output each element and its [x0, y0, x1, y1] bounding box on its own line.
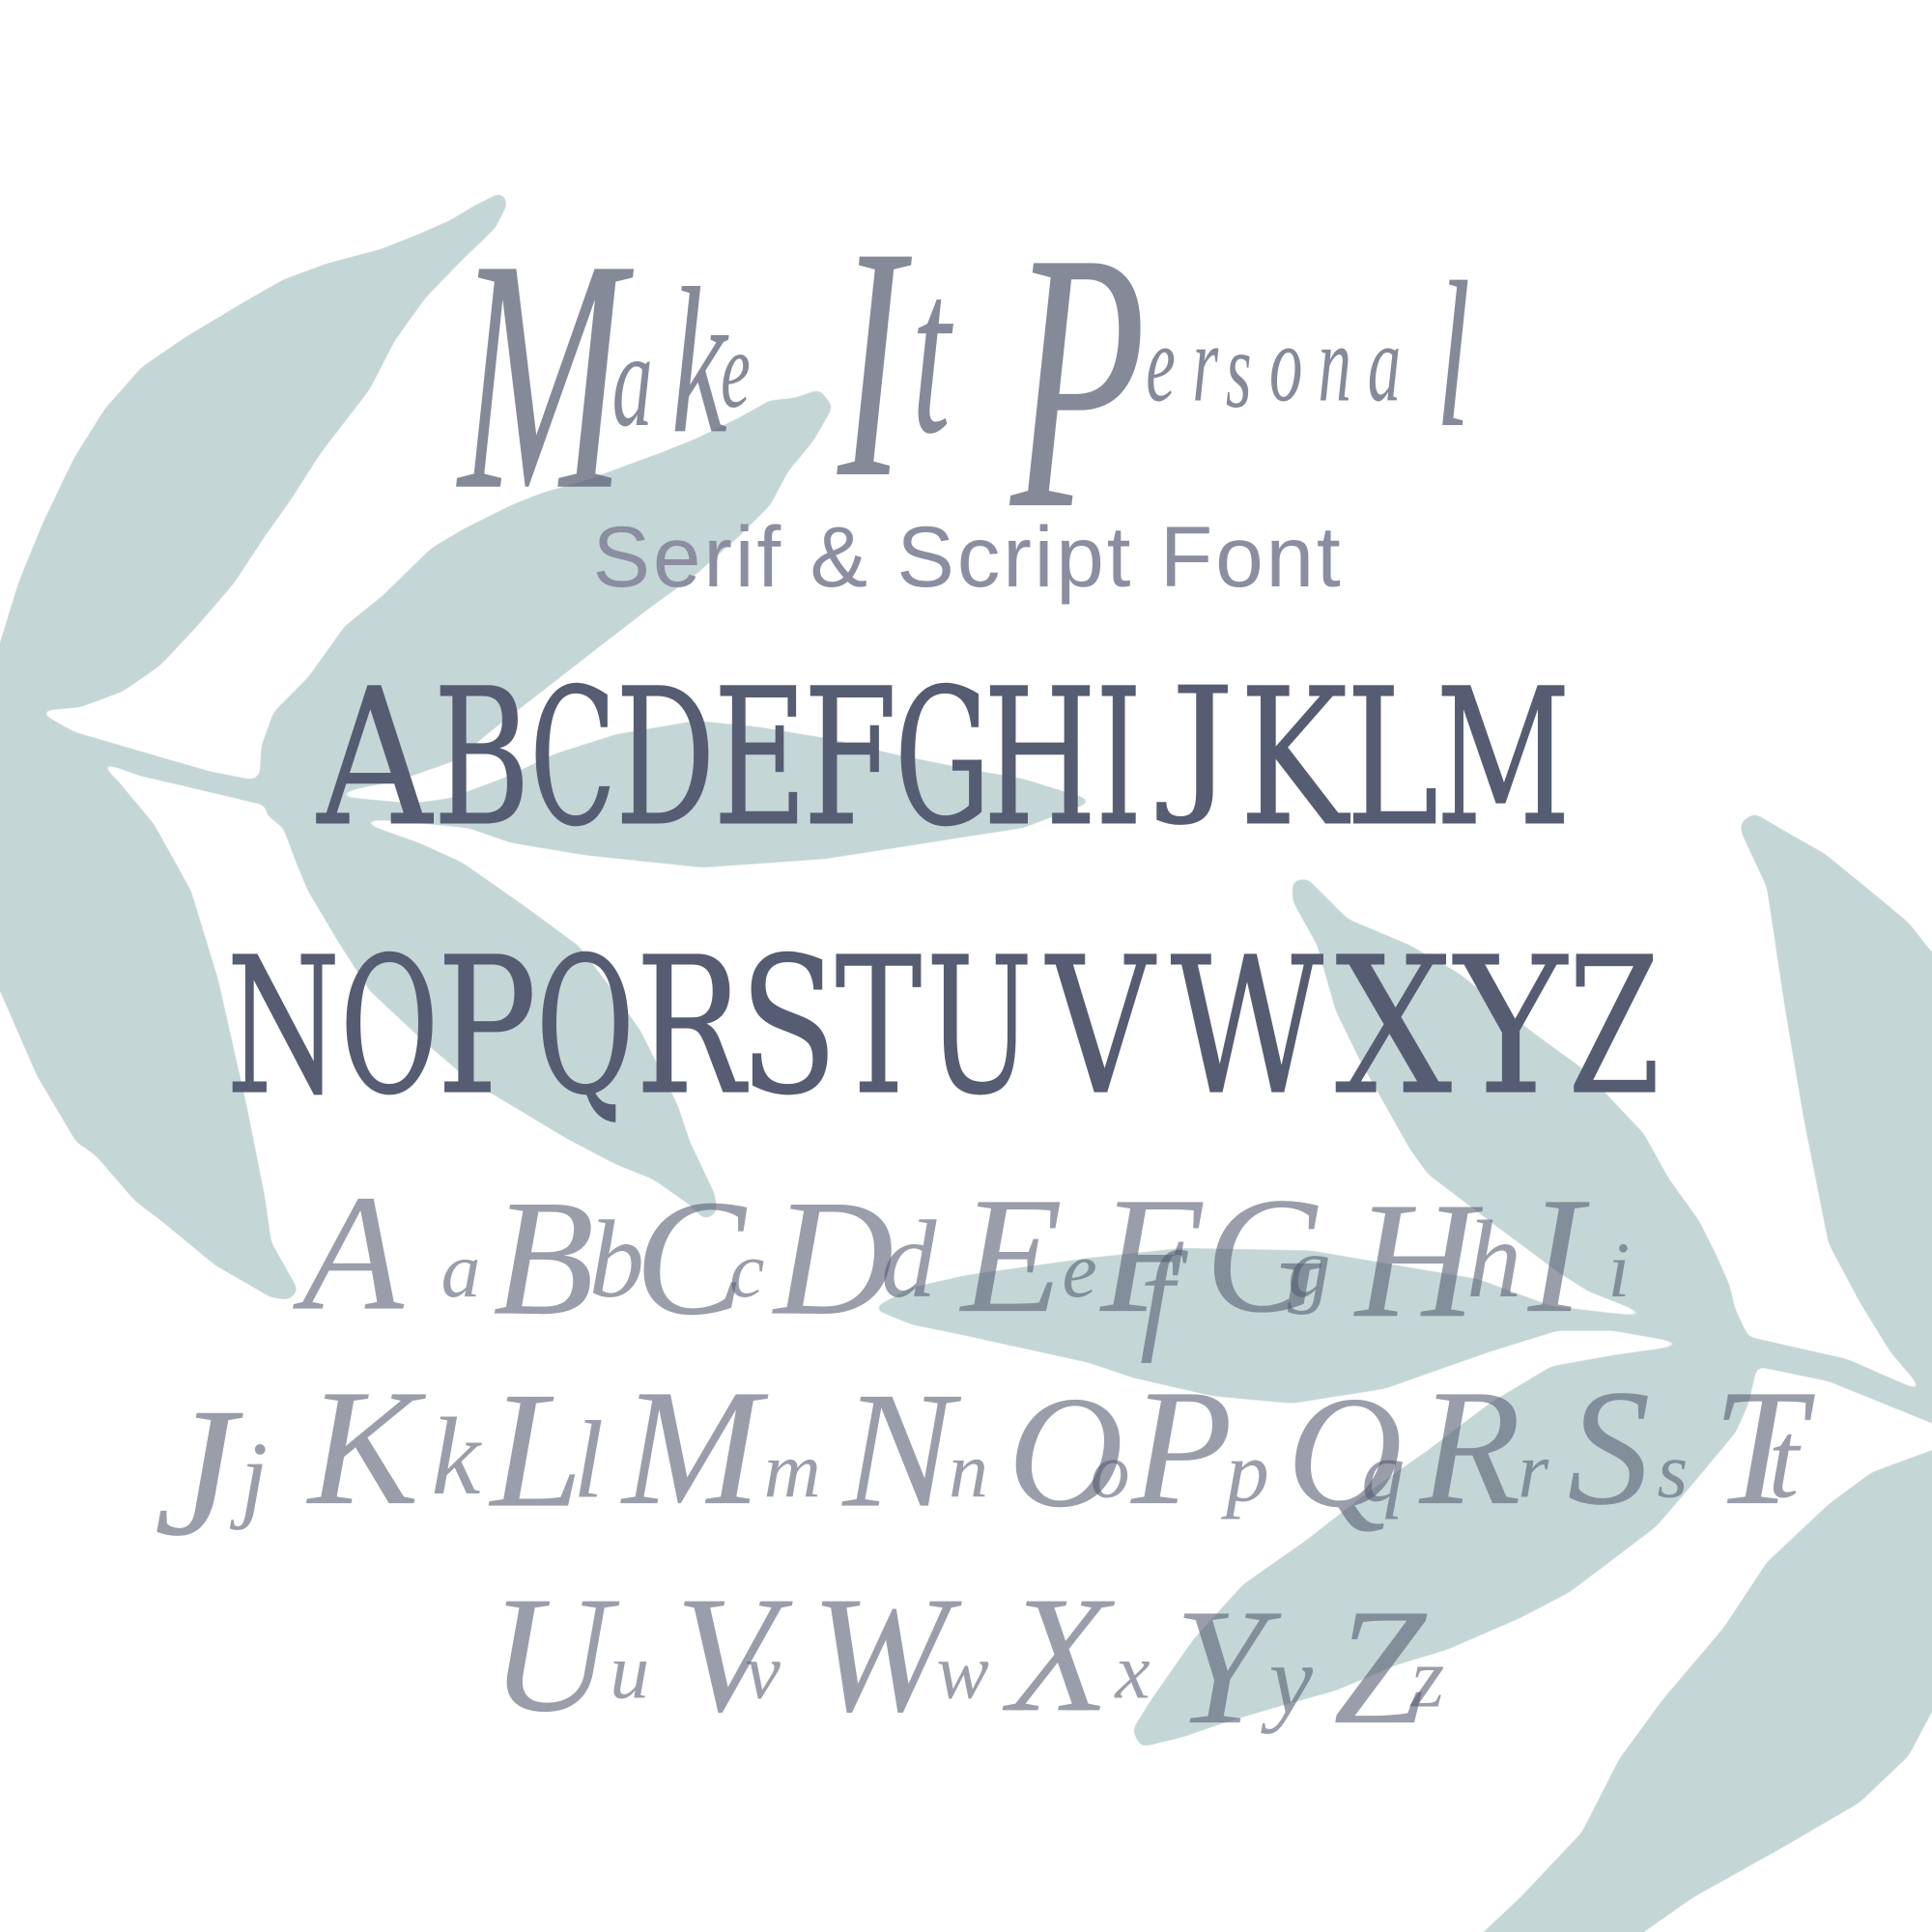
script alphabet row 3: U: [491, 1563, 620, 1747]
title: l: [1435, 239, 1470, 470]
script alphabet row 3: V: [675, 1563, 793, 1747]
serif alphabet row 2: W: [1171, 918, 1323, 1137]
script alphabet row 2: S: [1567, 1356, 1651, 1540]
script alphabet row 3: z: [1409, 1631, 1444, 1726]
script alphabet row 2: O: [1008, 1363, 1123, 1541]
script alphabet row 2: r: [1518, 1427, 1548, 1515]
right leaf branch: [872, 813, 1932, 1747]
script alphabet row 2: o: [1091, 1427, 1130, 1515]
script alphabet row 2: q: [1361, 1425, 1405, 1520]
script alphabet row 1: I: [1527, 1164, 1591, 1348]
title: n: [1319, 303, 1351, 425]
script alphabet row 2: M: [619, 1356, 769, 1540]
script alphabet row 3: x: [1114, 1628, 1151, 1716]
script alphabet row 2: n: [949, 1427, 988, 1515]
script alphabet row 2: p: [1220, 1425, 1269, 1520]
title: [455, 177, 1470, 586]
lower right leaf: [1454, 1435, 1932, 1932]
serif alphabet row 1: I: [1095, 649, 1142, 868]
title: r: [1192, 303, 1219, 425]
script alphabet row 1: F: [1099, 1164, 1204, 1348]
title: e: [1146, 303, 1176, 425]
serif alphabet row 1: [316, 647, 1571, 868]
script alphabet row 2: L: [488, 1359, 582, 1543]
script alphabet row 3: Y: [1175, 1576, 1283, 1759]
script alphabet row 3: X: [1002, 1563, 1115, 1747]
serif alphabet row 1: L: [1346, 649, 1438, 868]
script alphabet row 2: J: [154, 1371, 243, 1575]
script alphabet row 2: P: [1130, 1356, 1233, 1540]
title: P: [1008, 177, 1146, 586]
serif alphabet row 2: N: [226, 917, 340, 1137]
script alphabet row 3: v: [746, 1628, 781, 1716]
serif alphabet row 2: P: [437, 918, 537, 1137]
serif alphabet row 1: C: [529, 648, 616, 867]
script alphabet row 2: m: [764, 1427, 821, 1515]
script alphabet row 3: w: [936, 1628, 989, 1716]
serif alphabet row 2: U: [926, 918, 1033, 1137]
script alphabet row 1: a: [441, 1226, 480, 1314]
script alphabet row 1: c: [729, 1226, 764, 1314]
script alphabet row 3: y: [1261, 1626, 1314, 1735]
script alphabet row 2: k: [431, 1395, 482, 1518]
title: M: [455, 191, 637, 559]
title: o: [1269, 303, 1302, 425]
script alphabet row 1: A: [292, 1162, 404, 1346]
script alphabet row 1: E: [958, 1164, 1063, 1348]
script alphabet row 3: W: [810, 1563, 962, 1747]
script alphabet row 1: D: [772, 1167, 894, 1350]
serif alphabet row 1: B: [434, 648, 530, 867]
serif alphabet row 1: A: [316, 648, 434, 868]
script alphabet row 3: Z: [1333, 1576, 1428, 1759]
script alphabet row 1: h: [1466, 1198, 1521, 1321]
serif alphabet row 1: E: [714, 649, 807, 868]
script alphabet row 1: f: [1140, 1227, 1189, 1364]
serif alphabet row 1: M: [1435, 648, 1571, 867]
script alphabet row 2: t: [1768, 1399, 1802, 1521]
serif alphabet row 2: Q: [536, 917, 635, 1137]
serif alphabet row 2: Z: [1568, 917, 1660, 1136]
script alphabet row 1: i: [1608, 1226, 1630, 1314]
serif alphabet row 2: [226, 917, 1660, 1137]
script alphabet row 1: H: [1353, 1169, 1484, 1352]
script alphabet row 1: g: [1288, 1220, 1331, 1316]
serif alphabet row 1: F: [803, 649, 897, 868]
script alphabet row 1: d: [881, 1198, 937, 1321]
script alphabet row 2: K: [305, 1356, 427, 1540]
serif alphabet row 2: V: [1045, 918, 1156, 1137]
title: I: [835, 179, 913, 547]
script alphabet row 1: b: [589, 1198, 644, 1321]
title: t: [912, 224, 953, 483]
serif alphabet row 1: H: [983, 647, 1096, 868]
serif alphabet row 1: G: [895, 648, 991, 867]
script alphabet row 2: T: [1713, 1356, 1815, 1540]
title: a: [612, 305, 653, 456]
script alphabet row 1: e: [1062, 1226, 1097, 1314]
script alphabet row 3: u: [610, 1628, 649, 1716]
title: k: [671, 245, 729, 477]
serif alphabet row 2: O: [340, 917, 439, 1137]
title: e: [721, 309, 751, 431]
left leaf branch: [0, 192, 1094, 1300]
serif alphabet row 2: T: [836, 917, 922, 1137]
title: a: [1368, 303, 1401, 425]
script alphabet row 1: C: [635, 1167, 748, 1350]
script alphabet row 1: G: [1205, 1164, 1325, 1348]
serif alphabet row 2: R: [636, 918, 749, 1137]
script alphabet row 2: R: [1418, 1356, 1521, 1540]
serif alphabet row 1: K: [1239, 649, 1350, 868]
serif alphabet row 2: S: [740, 917, 838, 1136]
serif alphabet row 2: Y: [1452, 917, 1569, 1136]
script alphabet row 2: N: [840, 1359, 961, 1543]
serif alphabet row 1: J: [1156, 655, 1235, 829]
script alphabet row 2: s: [1658, 1427, 1688, 1515]
script alphabet row 2: Q: [1287, 1363, 1402, 1541]
title: s: [1226, 309, 1252, 431]
script alphabet row 2: j: [230, 1422, 268, 1531]
script alphabet row 1: B: [493, 1167, 594, 1350]
subtitle: Serif & Script Font: [593, 508, 1341, 605]
serif alphabet row 2: X: [1335, 918, 1452, 1137]
script alphabet row 2: l: [573, 1399, 604, 1521]
serif alphabet row 1: D: [615, 648, 715, 867]
